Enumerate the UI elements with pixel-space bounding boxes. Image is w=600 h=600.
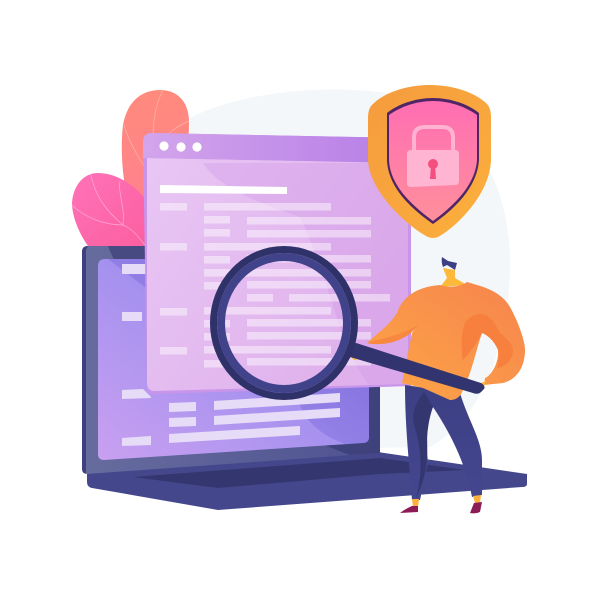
window body: [143, 133, 411, 394]
sweater: [367, 282, 525, 400]
person: [351, 257, 525, 513]
laptop: [82, 246, 527, 510]
sweater shadows: [462, 314, 513, 368]
ankles: [412, 495, 481, 507]
hand on handle: [476, 381, 486, 390]
laptop screen frame: [82, 246, 380, 474]
leaf: coral: [122, 90, 189, 250]
browser window: [143, 133, 411, 394]
laptop text rows: [122, 264, 340, 446]
window text rows: [160, 203, 390, 368]
laptop base: [87, 452, 527, 510]
laptop screen: [98, 259, 369, 460]
handle: [350, 342, 485, 394]
lock icon: [407, 127, 459, 187]
head: [440, 268, 467, 287]
window control dots: [159, 141, 202, 152]
hand under handle: [351, 352, 362, 360]
window title bar: [143, 133, 411, 163]
shield: [368, 85, 491, 238]
lens rim: [214, 250, 354, 396]
legs: [405, 385, 482, 500]
leaf: pink: [72, 173, 150, 246]
magnifying glass: [214, 250, 485, 396]
background blob: [190, 89, 510, 450]
window heading bar: [160, 185, 287, 194]
shoes: [400, 502, 482, 513]
